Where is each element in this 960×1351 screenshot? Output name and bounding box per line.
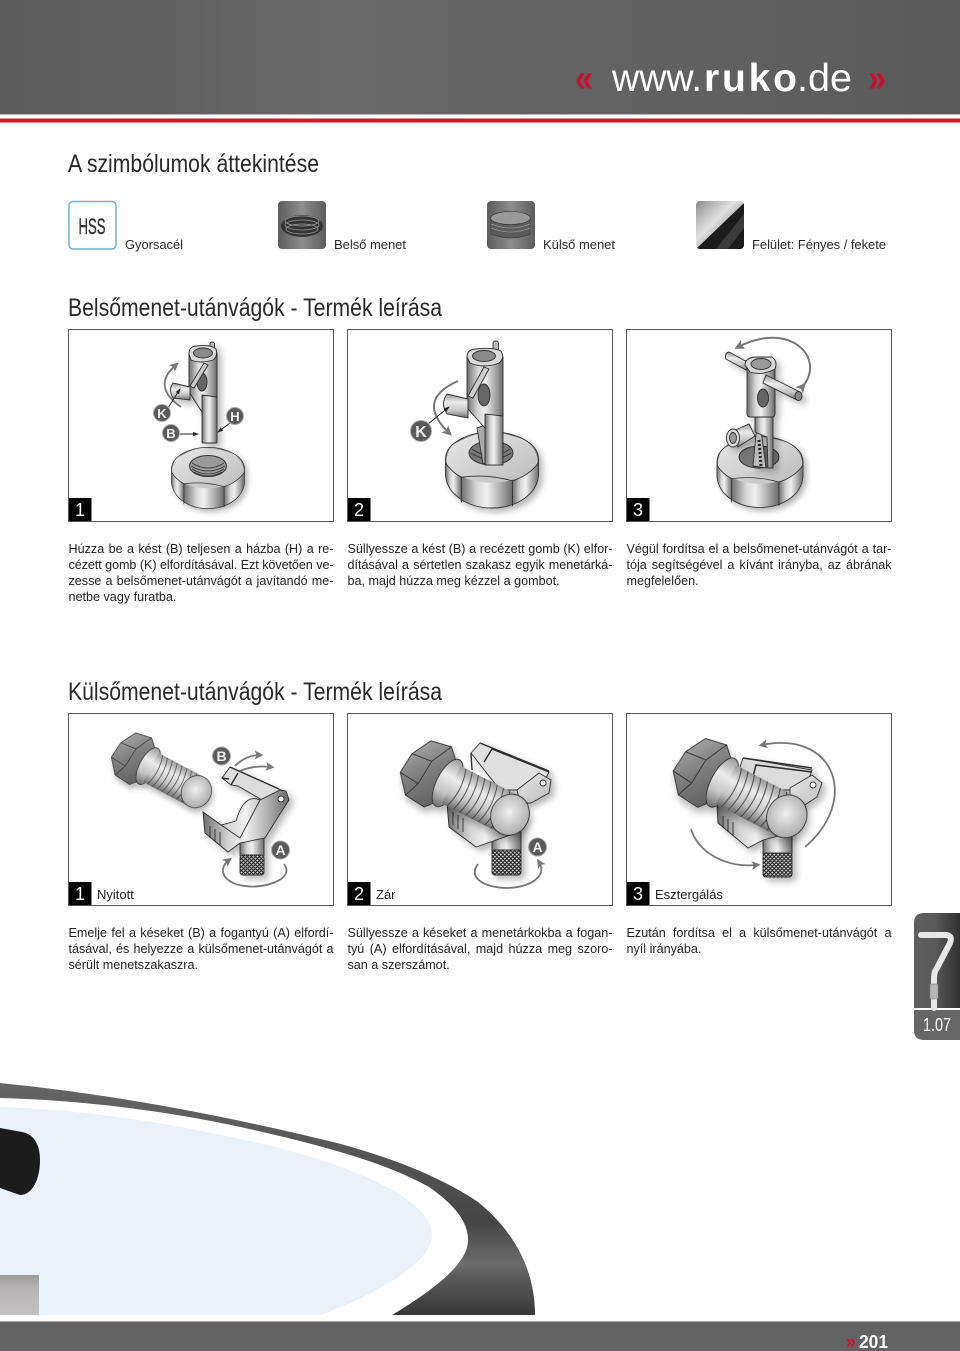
text: internal step 1 bbox=[68, 542, 334, 604]
step number and label bbox=[69, 882, 134, 905]
arrow: knob rotation bbox=[165, 365, 181, 407]
callout: B bbox=[162, 424, 198, 442]
step number and label bbox=[348, 882, 396, 905]
callout: B: B bbox=[166, 426, 176, 441]
website address: « bbox=[575, 57, 593, 100]
text: external step 3: Ezután fordítsa el a külsőmenet-utánvágót a bbox=[626, 926, 892, 940]
callout: B with arrows: B bbox=[216, 748, 227, 764]
icon: tap tool bbox=[725, 352, 802, 468]
symbol: surface bright / black: Felület: Fényes / fekete bbox=[752, 237, 886, 252]
heading: internal thread restorers: Belsőmenet-utánvágók - Termék leírása bbox=[68, 294, 442, 322]
side tab: chapter 1.07 bbox=[914, 913, 960, 1040]
symbol: HSS bbox=[69, 202, 183, 252]
icon: open clamp bbox=[203, 767, 289, 875]
text: internal step 2: dításával a sértetlen szakasz egyik menetárká- bbox=[348, 558, 612, 572]
website address: ruko bbox=[704, 57, 797, 100]
callout: A with rotation arrow: A bbox=[532, 839, 543, 855]
text: external step 1 bbox=[68, 926, 334, 972]
symbol: internal thread bbox=[278, 201, 406, 252]
icon: nut bbox=[446, 432, 538, 508]
icon: tap tool bbox=[170, 342, 217, 443]
website address: » bbox=[868, 57, 886, 100]
arrow: knob rotation bbox=[434, 381, 458, 433]
step number 3: 3 bbox=[633, 500, 643, 520]
step number and label: 1 bbox=[75, 884, 85, 904]
callout: K bbox=[154, 389, 180, 422]
step number 3 bbox=[627, 498, 650, 521]
callout: H: H bbox=[230, 409, 240, 424]
icon: nut bore bbox=[190, 456, 226, 476]
text: external step 1: sérült menetszakaszra. bbox=[68, 958, 198, 972]
website address: www. bbox=[611, 57, 702, 100]
text: external step 3: nyíl irányába. bbox=[626, 942, 701, 956]
heading: symbols overview: A szimbólumok áttekintése bbox=[68, 150, 319, 178]
heading: external thread restorers: Külsőmenet-utánvágók - Termék leírása bbox=[68, 678, 442, 706]
step number 1 bbox=[69, 498, 92, 521]
text: external step 1: tásával, és helyezze a külsőmenet-utánvágót a bbox=[68, 942, 334, 956]
text: internal step 2: Süllyessze a kést (B) a recézett gomb (K) elfor- bbox=[348, 542, 612, 556]
step number 1: 1 bbox=[75, 500, 85, 520]
icon: bolt bbox=[664, 729, 821, 855]
symbol: internal thread: Belső menet bbox=[334, 237, 406, 252]
text: external step 3 bbox=[626, 926, 892, 956]
text: internal step 3: tója segítségével a kívánt irányba, az ábrának bbox=[626, 558, 892, 572]
callout: K: K bbox=[157, 406, 167, 421]
text: external step 2: san a szerszámot. bbox=[348, 958, 450, 972]
text: internal step 1: netbe vagy furatba. bbox=[68, 590, 176, 604]
panel: external step 2 closed bbox=[348, 714, 612, 906]
footer band bbox=[0, 1321, 960, 1351]
icon: bolt bbox=[104, 725, 222, 821]
black cylinder bbox=[0, 1128, 40, 1195]
icon: closed clamp bbox=[447, 743, 551, 875]
step number 2 bbox=[348, 498, 370, 521]
website address: .de bbox=[797, 57, 852, 100]
symbol: HSS: Gyorsacél bbox=[125, 237, 183, 252]
text: external step 2: Süllyessze a késeket a menetárkokba a fogan- bbox=[348, 926, 612, 940]
step number and label bbox=[627, 882, 723, 905]
icon: nut bbox=[717, 437, 803, 507]
step number and label: 2 bbox=[354, 884, 364, 904]
icon: nut bore bbox=[739, 446, 779, 468]
text: internal step 3 bbox=[626, 542, 892, 588]
arrow: clockwise lower bbox=[691, 829, 757, 865]
text: internal step 2: ba, majd húzza meg kézzel a gombot. bbox=[348, 574, 560, 588]
panel: internal step 2 bbox=[348, 330, 612, 522]
icon: nut bbox=[172, 447, 244, 509]
text: internal step 1: cézett gomb (K) elfordításával. Ezt követően ve- bbox=[68, 558, 334, 572]
icon: tap tool bbox=[444, 341, 503, 465]
icon: nut bore bbox=[469, 441, 513, 465]
text: internal step 1: Húzza be a kést (B) teljesen a házba (H) a re- bbox=[68, 542, 334, 556]
callout: A with rotation arrow bbox=[475, 838, 546, 888]
arrow: tool rotation bbox=[738, 338, 810, 386]
symbol: external thread bbox=[487, 201, 615, 252]
symbol: HSS: HSS bbox=[78, 214, 106, 239]
text: internal step 3: megfelelően. bbox=[626, 574, 699, 588]
text: external step 2 bbox=[348, 926, 612, 972]
callout: H bbox=[218, 408, 244, 432]
grey block bbox=[0, 1275, 39, 1315]
callout: B with arrows bbox=[212, 747, 271, 771]
callout: K: K bbox=[415, 424, 427, 441]
symbol: surface bright / black bbox=[696, 201, 886, 252]
panel: external step 3 turning bbox=[626, 714, 892, 906]
step number and label: Nyitott bbox=[97, 887, 134, 902]
step number and label: Zár bbox=[376, 887, 396, 902]
step number and label: Esztergálás bbox=[655, 887, 723, 902]
symbol: external thread: Külső menet bbox=[543, 237, 615, 252]
text: internal step 3: Végül fordítsa el a belsőmenet-utánvágót a tar- bbox=[626, 542, 892, 556]
text: internal step 2 bbox=[348, 542, 612, 588]
callout: K bbox=[410, 407, 449, 442]
panel: external step 1 open bbox=[68, 714, 334, 906]
icon: bolt bbox=[391, 731, 542, 852]
decorative photo: dark rim with pale bowl bbox=[0, 1083, 535, 1315]
text: external step 1: Emelje fel a késeket (B) a fogantyú (A) elfordí- bbox=[68, 926, 334, 940]
header band bbox=[0, 0, 960, 122]
website address bbox=[575, 57, 886, 100]
side tab: chapter 1.07: 1.07 bbox=[923, 1015, 951, 1035]
step number 2: 2 bbox=[354, 500, 364, 520]
text: internal step 1: zesse a belsőmenet-utánvágót a javítandó me- bbox=[68, 574, 334, 588]
panel: internal step 3 bbox=[626, 330, 892, 522]
callout: A with rotation arrow: A bbox=[275, 842, 286, 858]
text: external step 2: tyú (A) elfordításával, majd húzza meg szoro- bbox=[348, 942, 612, 956]
icon: closed clamp bbox=[717, 758, 822, 877]
panel: internal step 1 bbox=[68, 330, 334, 522]
callout: A with rotation arrow bbox=[223, 841, 290, 887]
step number and label: 3 bbox=[633, 884, 643, 904]
arrow: clockwise upper bbox=[762, 743, 835, 847]
